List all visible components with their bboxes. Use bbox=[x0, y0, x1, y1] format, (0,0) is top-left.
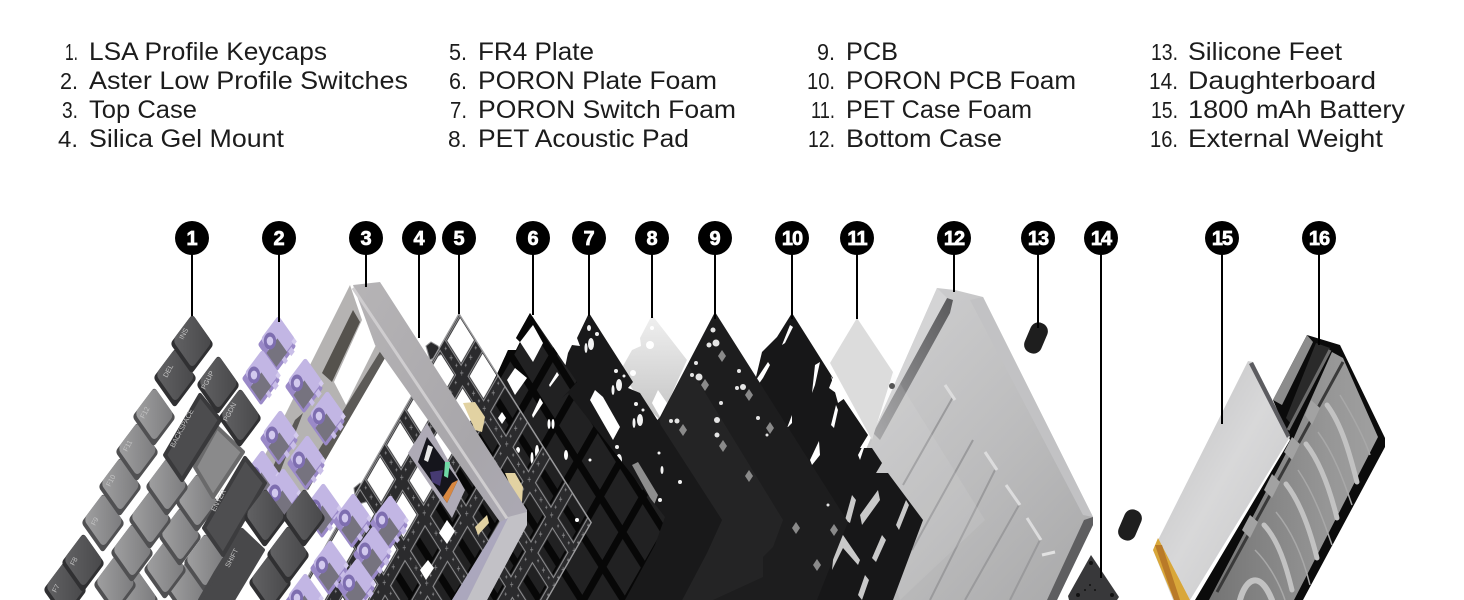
legend column 4: External Weight bbox=[1188, 125, 1383, 153]
legend column 4: 15. bbox=[1151, 97, 1178, 123]
key: pipe bbox=[195, 427, 243, 497]
badge 1: 1 bbox=[186, 228, 198, 250]
badge 8: 8 bbox=[646, 228, 658, 250]
part 3: top case frame bbox=[260, 282, 527, 600]
small openings showing through the plate bbox=[420, 520, 455, 580]
display housing bbox=[408, 423, 465, 518]
part 8: PET acoustic pad bbox=[623, 315, 687, 420]
display screen bbox=[418, 437, 458, 503]
part 13: silicone foot bbox=[1021, 320, 1051, 356]
badge 2 bbox=[262, 221, 296, 255]
badge 11 bbox=[840, 221, 874, 255]
part 10: PORON PCB foam bbox=[700, 313, 923, 600]
translucent acoustic pad overlay bbox=[660, 363, 783, 600]
part 6: PORON plate foam bbox=[384, 313, 662, 600]
key: backspace bbox=[165, 395, 220, 480]
legend column 2: PORON Switch Foam bbox=[478, 96, 736, 124]
part 5: FR4 plate bbox=[308, 314, 592, 600]
legend column 3: Bottom Case bbox=[846, 125, 1002, 153]
legend column 4: 1800 mAh Battery bbox=[1188, 96, 1406, 124]
key legends: DEL bbox=[163, 364, 175, 379]
badge 4: 4 bbox=[413, 228, 425, 250]
badge 2: 2 bbox=[273, 228, 285, 250]
key: enter bbox=[204, 458, 265, 555]
key legends: BACKSPACE bbox=[170, 408, 196, 449]
badge 6: 6 bbox=[527, 228, 539, 250]
key legends: SHIFT bbox=[225, 547, 241, 569]
part 4: silica gel mount bbox=[354, 342, 442, 505]
badge 15: 15 bbox=[1212, 228, 1233, 250]
legend column 4: Silicone Feet bbox=[1188, 38, 1342, 66]
badge 7 bbox=[572, 221, 606, 255]
parts legend bbox=[58, 38, 1406, 153]
badge 6 bbox=[516, 221, 550, 255]
legend column 2: FR4 Plate bbox=[478, 38, 594, 66]
badge 12 bbox=[937, 221, 971, 255]
part 15: battery bbox=[1153, 361, 1290, 600]
legend column 4 bbox=[1149, 38, 1406, 153]
badge 12: 12 bbox=[944, 228, 965, 250]
badge 13: 13 bbox=[1028, 228, 1049, 250]
part 11: PET case foam bbox=[830, 318, 985, 600]
legend column 1: 4. bbox=[58, 126, 78, 152]
part 12: bottom case bbox=[800, 288, 1093, 600]
key legends: F8 bbox=[70, 556, 80, 567]
legend column 3 bbox=[807, 38, 1076, 153]
badge 1 bbox=[175, 221, 209, 255]
badge 8 bbox=[635, 221, 669, 255]
legend column 3: PCB bbox=[846, 38, 898, 66]
key legends: F9 bbox=[91, 516, 101, 527]
legend column 3: 9. bbox=[817, 39, 835, 65]
key legends: F12 bbox=[140, 406, 151, 420]
legend column 2: 5. bbox=[449, 39, 467, 65]
legend column 1: 2. bbox=[60, 68, 78, 94]
badge 9: 9 bbox=[709, 228, 721, 250]
legend column 4: 13. bbox=[1151, 39, 1178, 65]
legend column 2: 7. bbox=[450, 97, 467, 123]
key: shift bbox=[200, 530, 263, 600]
legend column 1: Top Case bbox=[89, 96, 197, 124]
legend column 2 bbox=[448, 38, 736, 153]
badge 5: 5 bbox=[453, 228, 465, 250]
badge 14: 14 bbox=[1091, 228, 1113, 250]
part 7: PORON switch foam bbox=[500, 313, 722, 600]
gold mount clips bbox=[463, 402, 523, 535]
numbered badges bbox=[175, 221, 1336, 255]
badge 16: 16 bbox=[1309, 228, 1330, 250]
badge 14 bbox=[1084, 221, 1118, 255]
legend column 4: Daughterboard bbox=[1188, 67, 1376, 95]
legend column 3: PORON PCB Foam bbox=[846, 67, 1076, 95]
key legends: F7 bbox=[52, 583, 62, 594]
badge 13 bbox=[1021, 221, 1055, 255]
legend column 1: LSA Profile Keycaps bbox=[89, 38, 327, 66]
badge 10: 10 bbox=[782, 228, 803, 250]
badge 3: 3 bbox=[360, 228, 372, 250]
legend column 1: Silica Gel Mount bbox=[89, 125, 284, 153]
key legends: PGUP bbox=[201, 370, 216, 391]
part 13: second silicone foot bbox=[1115, 507, 1145, 543]
legend column 4: 14. bbox=[1149, 68, 1178, 94]
key legends: PGDN bbox=[223, 402, 238, 423]
legend column 2: 6. bbox=[449, 68, 467, 94]
legend column 3: 11. bbox=[811, 97, 835, 123]
legend column 1: 1. bbox=[65, 39, 78, 65]
legend column 3: PET Case Foam bbox=[846, 96, 1032, 124]
legend column 1: 3. bbox=[62, 97, 78, 123]
part 16: external weight bbox=[1195, 335, 1385, 600]
key legends: F11 bbox=[123, 439, 134, 453]
badge 3 bbox=[349, 221, 383, 255]
badge 7: 7 bbox=[583, 228, 595, 250]
key legends bbox=[52, 327, 241, 594]
badge 10 bbox=[775, 221, 809, 255]
badge 15 bbox=[1205, 221, 1239, 255]
badge 9 bbox=[698, 221, 732, 255]
key legends: F10 bbox=[106, 474, 117, 488]
legend column 1 bbox=[58, 38, 408, 153]
legend column 3: 10. bbox=[807, 68, 835, 94]
badge 11: 11 bbox=[847, 228, 867, 250]
badge 4 bbox=[402, 221, 436, 255]
leader lines bbox=[192, 238, 1319, 578]
key legends: INS bbox=[179, 327, 190, 341]
legend column 2: PET Acoustic Pad bbox=[478, 125, 689, 153]
part 1: keycaps bbox=[43, 314, 326, 600]
key legends: ENTER bbox=[211, 489, 228, 513]
legend column 2: PORON Plate Foam bbox=[478, 67, 717, 95]
legend column 3: 12. bbox=[808, 126, 835, 152]
legend column 2: 8. bbox=[448, 126, 467, 152]
legend column 1: Aster Low Profile Switches bbox=[89, 67, 408, 95]
badge 16 bbox=[1302, 221, 1336, 255]
legend column 4: 16. bbox=[1150, 126, 1178, 152]
part 2: switches bbox=[241, 315, 412, 600]
part 9: PCB bbox=[500, 312, 848, 600]
badge 5 bbox=[442, 221, 476, 255]
part 14: daughterboard bbox=[1068, 555, 1119, 600]
